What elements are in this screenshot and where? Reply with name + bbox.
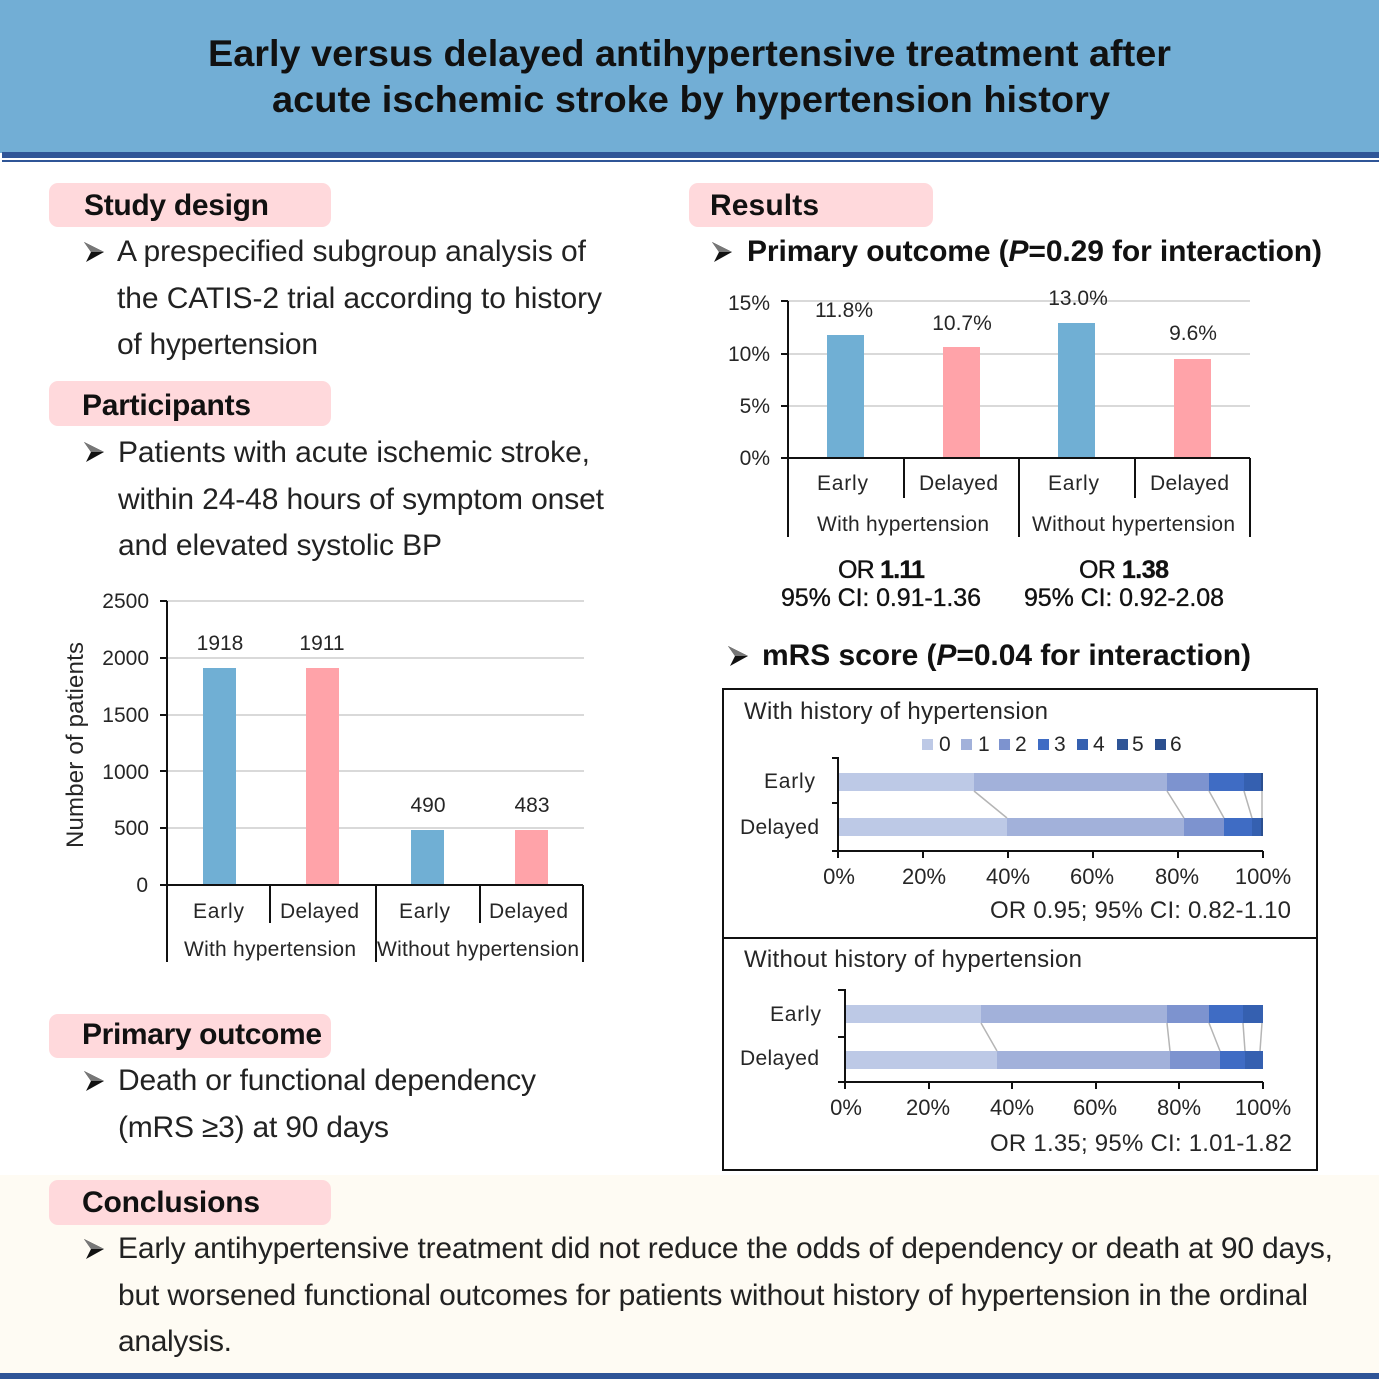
bar chart: number of patients: 2500 (102, 590, 149, 613)
bar chart: primary outcome rates (728, 287, 1250, 537)
heading: results: Results (710, 189, 819, 222)
legend: mRS scores: 0 (939, 733, 951, 756)
chart: mRS without history of hypertension: Early (770, 1003, 822, 1026)
bar chart: number of patients: With hypertension (184, 938, 356, 961)
chart: mRS with history of hypertension: With history of hypertension (744, 698, 1048, 725)
text block: primary outcome (84, 1064, 536, 1144)
legend: mRS scores: 6 (1170, 733, 1182, 756)
text block: participants: Patients with acute ischemic stroke, (118, 436, 590, 469)
chart: mRS without history of hypertension: 80% (1157, 1095, 1201, 1120)
chart: mRS without history of hypertension: 40% (990, 1095, 1034, 1120)
bar chart: number of patients: Early (193, 900, 244, 923)
chart: mRS without history of hypertension: 100% (1235, 1095, 1291, 1120)
chart: mRS with history of hypertension: 40% (986, 864, 1030, 889)
chart: mRS without history of hypertension: 60% (1073, 1095, 1117, 1120)
legend: mRS scores: 1 (978, 733, 990, 756)
title (208, 33, 1171, 120)
bar chart: number of patients: 1500 (102, 704, 149, 727)
heading: study design (49, 183, 331, 227)
bar chart: number of patients: 500 (114, 817, 149, 840)
chart: mRS with history of hypertension: 20% (902, 864, 946, 889)
chart: mRS with history of hypertension: OR 0.95; 95% CI: 0.82-1.10 (990, 897, 1291, 924)
heading: participants: Participants (82, 389, 251, 422)
heading: primary outcome (49, 1014, 331, 1058)
subheading: primary outcome interaction: Primary outcome (P=0.29 for interaction) (747, 235, 1322, 268)
bar chart: number of patients: Without hypertension (377, 938, 579, 961)
text block: conclusions: analysis. (118, 1325, 232, 1358)
text block: primary outcome: Death or functional dependency (118, 1064, 536, 1097)
bar chart: number of patients (62, 590, 584, 962)
bar chart: number of patients: Number of patients (62, 642, 89, 848)
chart: mRS without history of hypertension: Delayed (740, 1047, 819, 1070)
bar chart: primary outcome rates: Delayed (1150, 472, 1229, 495)
chart: mRS with history of hypertension: 100% (1235, 864, 1291, 889)
text block: study design: A prespecified subgroup analysis of (117, 235, 587, 268)
bar chart: number of patients: 490 (410, 794, 446, 817)
odds ratios: primary outcome: OR 1.11 (838, 556, 925, 584)
text block: study design: of hypertension (117, 328, 318, 361)
bar chart: primary outcome rates: 5% (740, 395, 770, 418)
bar chart: primary outcome rates: 0% (740, 447, 770, 470)
heading: results (689, 183, 933, 227)
text block: study design: the CATIS-2 trial according to history (117, 282, 602, 315)
bar chart: number of patients: 1000 (102, 761, 149, 784)
legend: mRS scores: 3 (1054, 733, 1066, 756)
bar chart: number of patients: Delayed (489, 900, 568, 923)
bar chart: number of patients: 2000 (102, 647, 149, 670)
chart: mRS without history of hypertension: Without history of hypertension (744, 946, 1082, 973)
bar chart: primary outcome rates: Early (1048, 472, 1100, 495)
bar chart: primary outcome rates: Delayed (919, 472, 998, 495)
heading: conclusions (49, 1180, 331, 1225)
chart: mRS without history of hypertension: OR 1.35; 95% CI: 1.01-1.82 (990, 1130, 1292, 1157)
legend: mRS scores: 4 (1093, 733, 1105, 756)
chart: mRS with history of hypertension: 80% (1155, 864, 1199, 889)
bar chart: primary outcome rates: Early (817, 472, 868, 495)
subheading: mRS score interaction: mRS score (P=0.04 for interaction) (762, 639, 1251, 672)
legend: mRS scores: 2 (1015, 733, 1027, 756)
text block: participants (84, 436, 605, 562)
text block: participants: and elevated systolic BP (118, 529, 442, 562)
odds ratios: primary outcome (781, 556, 1224, 612)
odds ratios: primary outcome: 95% CI: 0.91-1.36 (781, 584, 981, 612)
panel: study design (49, 183, 602, 361)
odds ratios: primary outcome: 95% CI: 0.92-2.08 (1024, 584, 1224, 612)
bottom bar (0, 1373, 1379, 1379)
chart: mRS with history of hypertension (740, 698, 1291, 924)
heading: participants (49, 381, 331, 426)
legend: mRS scores: 5 (1132, 733, 1144, 756)
title: acute ischemic stroke by hypertension history (272, 79, 1110, 120)
text block: participants: within 24-48 hours of symptom onset (117, 483, 605, 516)
chart: mRS with history of hypertension: Delayed (740, 816, 819, 839)
text block: conclusions: Early antihypertensive treatment did not reduce the odds of dependency or death at 90 days, (118, 1232, 1333, 1265)
bar chart: primary outcome rates: Without hypertension (1032, 513, 1235, 536)
bar chart: primary outcome rates: With hypertension (817, 513, 989, 536)
bar chart: number of patients: Early (399, 900, 450, 923)
chart: mRS with history of hypertension: Early (764, 770, 816, 793)
bar chart: primary outcome rates: 10.7% (932, 312, 992, 335)
panel: mRS charts box (723, 689, 1317, 1170)
title: Early versus delayed antihypertensive treatment after (208, 33, 1171, 74)
bar chart: number of patients: 0 (136, 874, 148, 897)
bar chart: primary outcome rates: 9.6% (1169, 322, 1217, 345)
bar chart: number of patients: Delayed (280, 900, 359, 923)
bar chart: number of patients: 1911 (299, 632, 345, 655)
chart: mRS without history of hypertension: 20% (906, 1095, 950, 1120)
bar chart: primary outcome rates: 11.8% (815, 299, 873, 322)
text block: conclusions (84, 1232, 1333, 1358)
heading: conclusions: Conclusions (82, 1186, 260, 1219)
bar chart: primary outcome rates: 10% (728, 343, 770, 366)
header banner (0, 0, 1379, 162)
panel: conclusions background (0, 1175, 1379, 1373)
text block: conclusions: but worsened functional outcomes for patients without history of hypertension in the ordinal (118, 1279, 1308, 1312)
bar chart: number of patients: 483 (514, 794, 550, 817)
chart: mRS with history of hypertension: 0% (823, 864, 855, 889)
odds ratios: primary outcome: OR 1.38 (1079, 556, 1169, 584)
chart: mRS without history of hypertension: 0% (830, 1095, 862, 1120)
panel: participants (49, 381, 605, 562)
panel: conclusions (49, 1180, 1333, 1358)
bar chart: primary outcome rates: 13.0% (1048, 287, 1108, 310)
text block: primary outcome: (mRS ≥3) at 90 days (118, 1111, 389, 1144)
panel: primary outcome (49, 1014, 536, 1144)
chart: mRS without history of hypertension (740, 946, 1292, 1157)
legend: mRS scores (922, 733, 1182, 756)
chart: mRS with history of hypertension: 60% (1070, 864, 1114, 889)
heading: study design: Study design (84, 189, 269, 222)
text block: study design (84, 235, 602, 361)
bar chart: number of patients: 1918 (197, 632, 243, 655)
bar chart: primary outcome rates: 15% (728, 292, 770, 315)
heading: primary outcome: Primary outcome (82, 1018, 322, 1051)
panel: results (689, 183, 1322, 1170)
